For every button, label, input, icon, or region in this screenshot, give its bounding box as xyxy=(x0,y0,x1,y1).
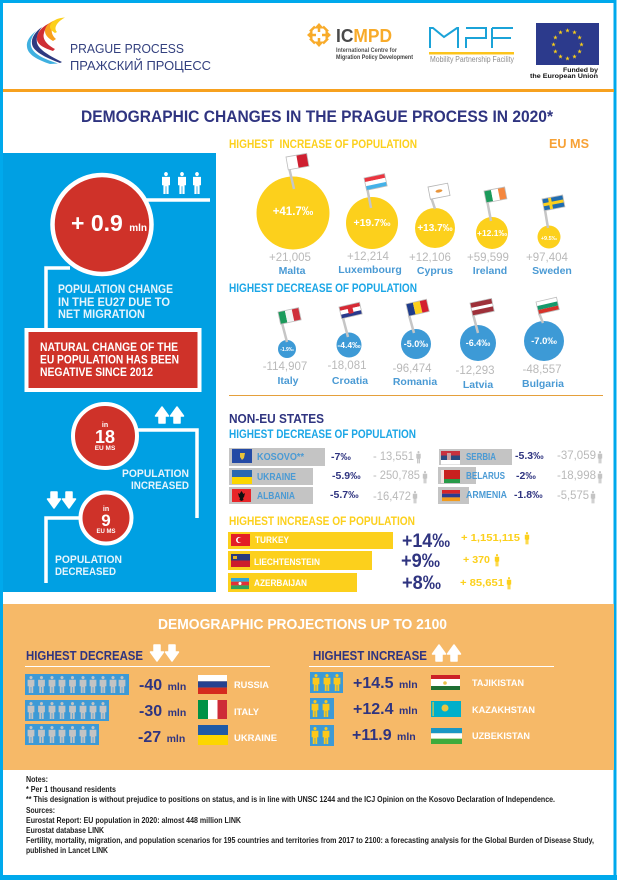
item: Italy: -114,907 xyxy=(263,361,307,373)
item: Luxembourg: +12,214 xyxy=(347,251,390,263)
item: Luxembourg: Luxembourg xyxy=(338,264,402,276)
row: Armenia: -5,575 xyxy=(557,490,589,502)
circle: in 9 EU MS xyxy=(80,492,132,544)
notes and sources: Sources: xyxy=(26,806,55,815)
callout: natural change xyxy=(26,330,200,390)
item: Bulgaria: -48,557 xyxy=(522,364,562,376)
circle: in 18 EU MS: EU MS xyxy=(95,445,116,452)
heading: highest increase: HIGHEST INCREASE xyxy=(313,648,427,663)
row: Liechtenstein: LIECHTENSTEIN xyxy=(254,557,320,568)
row: Kazakhstan xyxy=(310,698,535,719)
row: Azerbaijan: +8‰ xyxy=(402,573,441,594)
row: Ukraine projection xyxy=(25,724,277,746)
heading: non-EU highest decrease: HIGHEST DECREASE OF POPULATION xyxy=(229,427,416,441)
circle: +0.9 mln xyxy=(52,175,152,274)
circle: in 18 EU MS xyxy=(73,404,137,468)
item: Bulgaria: -7.0‰ xyxy=(531,336,557,347)
item: Romania xyxy=(392,299,437,388)
header rule xyxy=(3,89,614,92)
heading: highest decrease xyxy=(25,645,270,667)
icon: three people xyxy=(162,172,201,194)
item: Latvia: -6.4‰ xyxy=(466,338,490,348)
item: Malta: +41.7‰ xyxy=(273,206,314,218)
heading: highest increase xyxy=(309,645,554,667)
notes and sources: Eurostat Report: EU population in 2020: almost 448 million LINK xyxy=(26,816,241,825)
item: Cyprus xyxy=(409,183,455,277)
heading: non-EU states: NON-EU STATES xyxy=(229,411,324,426)
row: Albania: -5.7‰ xyxy=(330,489,359,501)
item: Cyprus: Cyprus xyxy=(417,265,453,277)
row: Kosovo xyxy=(229,448,421,466)
item: Latvia xyxy=(455,298,496,391)
item: Cyprus: +12,106 xyxy=(409,252,451,264)
row: Liechtenstein: + 370 xyxy=(463,554,490,566)
row: Armenia: -1.8‰ xyxy=(514,489,543,501)
item: Croatia: -4.4‰ xyxy=(337,340,361,350)
text: population change: NET MIGRATION xyxy=(58,309,145,321)
row: Liechtenstein xyxy=(228,551,499,572)
row: Turkey: TURKEY xyxy=(255,535,290,546)
circle: in 9 EU MS: in xyxy=(103,506,109,513)
heading: non-EU highest increase: HIGHEST INCREASE OF POPULATION xyxy=(229,514,415,528)
row: Italy: -30 mln xyxy=(139,703,186,720)
heading: projections: DEMOGRAPHIC PROJECTIONS UP TO 2100 xyxy=(158,616,447,633)
logo: ICMPD: ICMPD xyxy=(336,26,392,46)
item: Sweden: Sweden xyxy=(532,265,572,277)
row: Turkey: +14‰ xyxy=(402,531,450,552)
text: population decreased: DECREASED xyxy=(55,566,116,578)
icon: up arrows xyxy=(156,407,184,423)
callout: natural change: NATURAL CHANGE OF THE xyxy=(40,342,178,354)
heading: EU MS: EU MS xyxy=(549,136,589,151)
item: Bulgaria xyxy=(522,297,564,390)
item: Sweden: +97,404 xyxy=(526,252,569,264)
notes and sources: Notes: xyxy=(26,775,48,784)
row: Ukraine projection: -27 mln xyxy=(138,729,185,746)
icon: down arrows xyxy=(48,492,76,508)
row: Kosovo: -7‰ xyxy=(331,451,351,463)
item: Bulgaria: Bulgaria xyxy=(522,378,564,390)
row: Azerbaijan xyxy=(228,573,511,594)
row: Uzbekistan: +11.9 mln xyxy=(352,727,416,744)
text: population decreased xyxy=(55,554,122,578)
notes and sources: Eurostat database LINK xyxy=(26,826,104,835)
row: Russia xyxy=(25,674,269,695)
row: Serbia: -5.3‰ xyxy=(515,450,544,462)
row: Russia: -40 mln xyxy=(139,677,186,694)
logo: EU flag: the European Union xyxy=(530,73,598,80)
logo: EU flag: Funded by xyxy=(563,67,598,74)
panel: demographic projections xyxy=(3,604,614,770)
row: Tajikistan: +14.5 mln xyxy=(353,675,418,692)
logo: ICMPD: International Centre for xyxy=(336,48,398,54)
heading: highest decrease EU: HIGHEST DECREASE OF POPULATION xyxy=(229,281,417,295)
item: Ireland xyxy=(467,187,509,277)
row: Albania xyxy=(229,487,417,504)
circle: in 18 EU MS: in xyxy=(102,422,108,429)
text: population change xyxy=(58,284,173,321)
row: Armenia: ARMENIA xyxy=(466,490,507,501)
item: Croatia: Croatia xyxy=(332,375,368,387)
item: Cyprus: +13.7‰ xyxy=(417,223,453,234)
row: Liechtenstein: +9‰ xyxy=(401,551,440,572)
item: Luxembourg xyxy=(338,174,402,276)
logo: Prague Process: PRAGUE PROCESS xyxy=(70,41,184,56)
row: Turkey xyxy=(228,531,529,552)
row: Azerbaijan: + 85,651 xyxy=(460,577,504,589)
row: Azerbaijan: AZERBAIJAN xyxy=(254,578,307,589)
notes and sources xyxy=(26,775,594,855)
text: population increased xyxy=(122,468,189,492)
item: Sweden xyxy=(526,195,572,277)
item: Ireland: +59,599 xyxy=(467,252,509,264)
row: Uzbekistan: UZBEKISTAN xyxy=(472,731,530,742)
logo: ICMPD xyxy=(307,23,413,61)
row: Serbia: -37,059 xyxy=(557,450,596,462)
row: Belarus: BELARUS xyxy=(466,471,505,482)
row: Albania: -16,472 xyxy=(373,491,411,503)
item: Romania: Romania xyxy=(393,376,437,388)
row: Albania: ALBANIA xyxy=(257,491,295,502)
heading: highest increase EU: HIGHEST INCREASE OF POPULATION xyxy=(229,137,417,151)
notes and sources: * Per 1 thousand residents xyxy=(26,785,116,794)
text: population increased: INCREASED xyxy=(131,480,189,492)
item: Italy: -1.9‰ xyxy=(280,347,294,353)
row: Ukraine xyxy=(229,468,427,485)
title: DEMOGRAPHIC CHANGES IN THE PRAGUE PROCESS IN 2020* xyxy=(81,107,553,126)
item: Malta: Malta xyxy=(279,265,306,277)
row: Ukraine: - 250,785 xyxy=(373,470,420,482)
text: population decreased: POPULATION xyxy=(55,554,122,566)
text: population change: POPULATION CHANGE xyxy=(58,284,173,296)
row: Kazakhstan: KAZAKHSTAN xyxy=(472,705,535,716)
item: Luxembourg: +19.7‰ xyxy=(353,217,391,229)
row: Ukraine projection: UKRAINE xyxy=(234,733,277,744)
row: Tajikistan: TAJIKISTAN xyxy=(472,678,524,689)
logo: Prague Process xyxy=(27,18,211,73)
text: population increased: POPULATION xyxy=(122,468,189,480)
logo: MPF xyxy=(429,28,514,64)
row: Belarus: -18,998 xyxy=(557,470,596,482)
logo: EU flag xyxy=(530,23,599,80)
item: Croatia xyxy=(327,302,368,387)
row: Kosovo: KOSOVO** xyxy=(257,452,304,463)
row: Ukraine: -5.9‰ xyxy=(332,470,361,482)
logo: MPF: Mobility Partnership Facility xyxy=(430,55,514,64)
row: Serbia: SERBIA xyxy=(466,452,496,463)
row: Turkey: + 1,151,115 xyxy=(461,532,520,544)
item: Romania: -96,474 xyxy=(392,363,432,375)
connector lines xyxy=(46,200,210,583)
item: Malta xyxy=(256,153,330,277)
item: Romania: -5.0‰ xyxy=(404,339,428,349)
item: Ireland: Ireland xyxy=(473,265,507,277)
item: Latvia: Latvia xyxy=(463,379,493,391)
item: Latvia: -12,293 xyxy=(455,365,495,377)
row: Tajikistan xyxy=(310,672,524,693)
notes and sources: ** This designation is without prejudice to positions on status, and is in line with UNSC 1244 and the ICJ Opinion on the Kosovo Declaration of Independence. xyxy=(26,795,555,804)
notes and sources: published in Lancet LINK xyxy=(26,846,108,855)
item: Italy: Italy xyxy=(277,375,299,387)
callout: natural change: EU POPULATION HAS BEEN xyxy=(40,354,179,366)
row: Belarus: -2‰ xyxy=(516,470,536,482)
item: Italy xyxy=(263,308,307,387)
row: Belarus xyxy=(438,467,602,484)
logo: ICMPD: Migration Policy Development xyxy=(336,55,413,61)
item: Ireland: +12.1‰ xyxy=(477,228,507,238)
item: Sweden: +9.5‰ xyxy=(541,236,558,242)
callout: natural change: NEGATIVE SINCE 2012 xyxy=(40,367,153,379)
row: Italy: ITALY xyxy=(234,707,260,718)
circle: in 18 EU MS: 18 xyxy=(95,427,115,447)
row: Armenia xyxy=(438,487,595,504)
panel: EU summary xyxy=(3,153,216,592)
row: Kosovo: - 13,551 xyxy=(373,451,414,463)
circle: +0.9 mln: + 0.9 mln xyxy=(71,210,147,236)
row: Russia: RUSSIA xyxy=(234,680,269,691)
row: Ukraine: UKRAINE xyxy=(257,472,296,483)
row: Serbia xyxy=(439,449,602,465)
circle: in 9 EU MS: EU MS xyxy=(96,529,116,535)
item: Malta: +21,005 xyxy=(269,252,311,264)
item: Croatia: -18,081 xyxy=(327,360,367,372)
row: Kazakhstan: +12.4 mln xyxy=(353,701,418,718)
circle: in 9 EU MS: 9 xyxy=(101,511,111,530)
row: Italy xyxy=(25,700,260,721)
text: population change: IN THE EU27 DUE TO xyxy=(58,297,170,309)
logo: Prague Process: ПРАЖСКИЙ ПРОЦЕСС xyxy=(70,58,211,73)
heading: highest decrease: HIGHEST DECREASE xyxy=(26,648,143,663)
row: Uzbekistan xyxy=(310,725,530,746)
